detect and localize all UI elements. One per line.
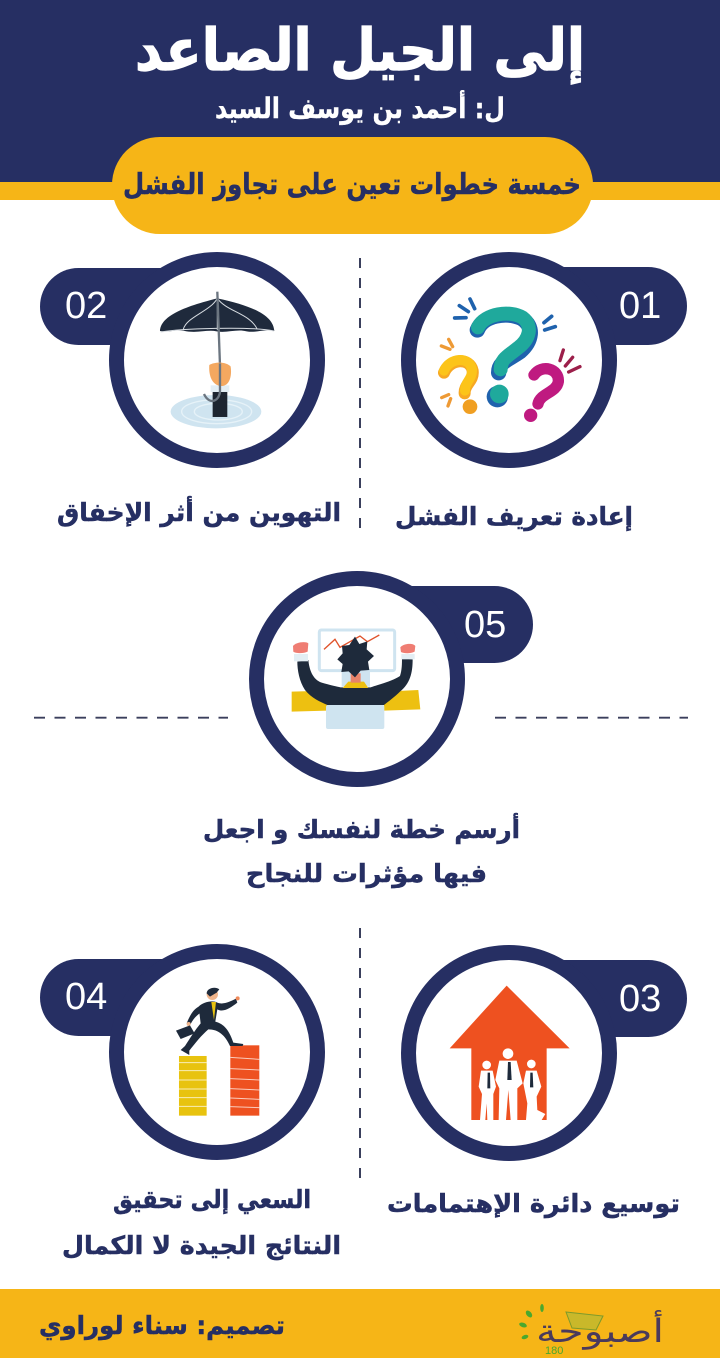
icon: question marks xyxy=(441,299,580,422)
label: step 05: أرسم خطة لنفسك و اجعل xyxy=(203,813,520,845)
logo: أصبوحة xyxy=(536,1310,664,1350)
panel: step 01 xyxy=(408,260,687,460)
label: step 02: التهوين من أثر الإخفاق xyxy=(57,496,341,528)
logo xyxy=(518,1304,664,1357)
label: step 03: توسيع دائرة الإهتمامات xyxy=(387,1189,680,1219)
panel: step 02 xyxy=(40,260,318,460)
icon: man stepping up bars xyxy=(176,988,259,1116)
footer band xyxy=(0,1289,720,1358)
author line: ل: أحمد بن يوسف السيد xyxy=(215,90,505,125)
badge 03 xyxy=(408,952,687,1154)
badge 02: 02 xyxy=(65,285,107,327)
badge 05: 05 xyxy=(464,604,506,646)
panel: step 05 xyxy=(256,578,533,780)
badge 03: 03 xyxy=(619,978,661,1020)
subtitle pill: خمسة خطوات تعين على تجاوز الفشل xyxy=(123,167,581,201)
subtitle pill xyxy=(112,137,593,234)
badge 04 xyxy=(40,952,318,1152)
icon: person at monitor xyxy=(292,630,420,729)
badge 04: 04 xyxy=(65,976,107,1018)
title: إلى الجيل الصاعد xyxy=(135,16,585,85)
badge 01: 01 xyxy=(619,285,661,327)
label: step 04 xyxy=(62,1185,341,1261)
badge 05 xyxy=(256,578,533,780)
badge 02 xyxy=(40,260,318,460)
label: step 04: السعي إلى تحقيق xyxy=(113,1185,311,1215)
label: step 05 xyxy=(203,813,520,889)
panel: step 03 xyxy=(408,952,687,1154)
panel: step 04 xyxy=(40,952,318,1152)
badge 01 xyxy=(408,260,687,460)
label: step 04: النتائج الجيدة لا الكمال xyxy=(62,1231,341,1261)
logo: 180 xyxy=(545,1345,563,1357)
icon: house arrow with people xyxy=(450,986,570,1120)
header band xyxy=(0,0,720,200)
icon: umbrella in puddle xyxy=(160,292,274,428)
label: step 01: إعادة تعريف الفشل xyxy=(395,502,633,532)
label: step 05: فيها مؤثرات للنجاح xyxy=(246,859,487,889)
designer credit: تصميم: سناء لوراوي xyxy=(39,1311,285,1341)
